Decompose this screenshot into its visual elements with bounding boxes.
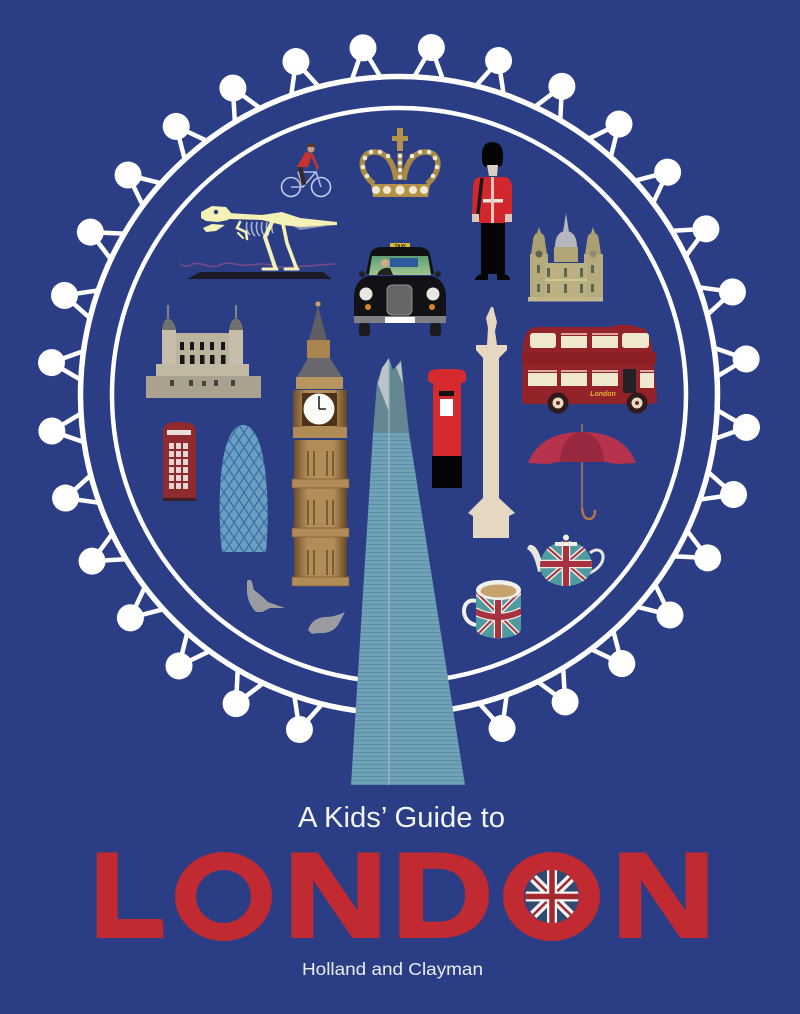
icon: pigeons <box>247 580 345 634</box>
title: london: D <box>392 828 493 962</box>
icon: st paul's cathedral <box>528 213 603 302</box>
icon: cyclist <box>282 143 330 196</box>
icon: royal guard <box>472 142 512 280</box>
title: london: O <box>171 831 276 963</box>
london eye wheel <box>35 31 763 748</box>
icon: union jack in letter O <box>525 869 579 924</box>
title: london: N <box>284 829 387 963</box>
icon: union jack mug <box>464 580 524 642</box>
icon: gherkin building <box>220 425 268 552</box>
icon: tower of london <box>146 305 261 398</box>
icon: big ben <box>292 301 349 586</box>
icon: crown <box>361 128 439 197</box>
subtitle: A Kids’ Guide to <box>298 802 505 834</box>
title: london: L <box>90 828 165 962</box>
icon: union jack teapot <box>527 534 603 588</box>
icon: red post box <box>428 369 466 488</box>
icon: umbrella <box>528 424 636 519</box>
icon: black taxi <box>354 243 446 336</box>
icon: nelson's column <box>468 307 515 538</box>
title: london: N <box>612 829 715 963</box>
icon: red double decker bus <box>522 325 657 414</box>
icon: the shard <box>351 358 465 785</box>
icon: red telephone box <box>163 422 196 501</box>
title: london <box>90 828 715 963</box>
icon: dinosaur skeleton <box>180 206 337 279</box>
icon: red double decker bus: London <box>590 391 616 398</box>
authors: Holland and Clayman <box>302 959 483 979</box>
title: london: O <box>499 831 604 963</box>
icon: black taxi: TAXI <box>394 244 406 250</box>
